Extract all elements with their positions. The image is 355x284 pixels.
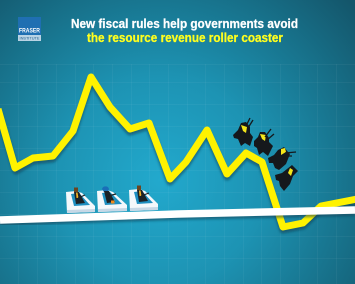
logo: Fraser Institute [18, 17, 41, 41]
coaster cart: right [129, 186, 158, 211]
coaster cart: middle [97, 186, 127, 212]
white track shadow [0, 214, 355, 224]
dark cart: first [233, 118, 253, 146]
dark cart: second [254, 129, 274, 156]
dark cart: fourth [275, 165, 298, 191]
logo: Fraser Institute: INSTITUTE [20, 37, 40, 41]
title [71, 17, 298, 45]
title: the resource revenue roller coaster [87, 31, 283, 45]
title: New fiscal rules help governments avoid [71, 17, 298, 31]
dark cart: third [268, 147, 296, 170]
white track [0, 210, 355, 220]
yellow line shadow [0, 80, 355, 230]
coaster cart: left [66, 188, 95, 213]
yellow revenue line [0, 77, 355, 227]
logo: Fraser Institute: FRASER [19, 28, 40, 34]
